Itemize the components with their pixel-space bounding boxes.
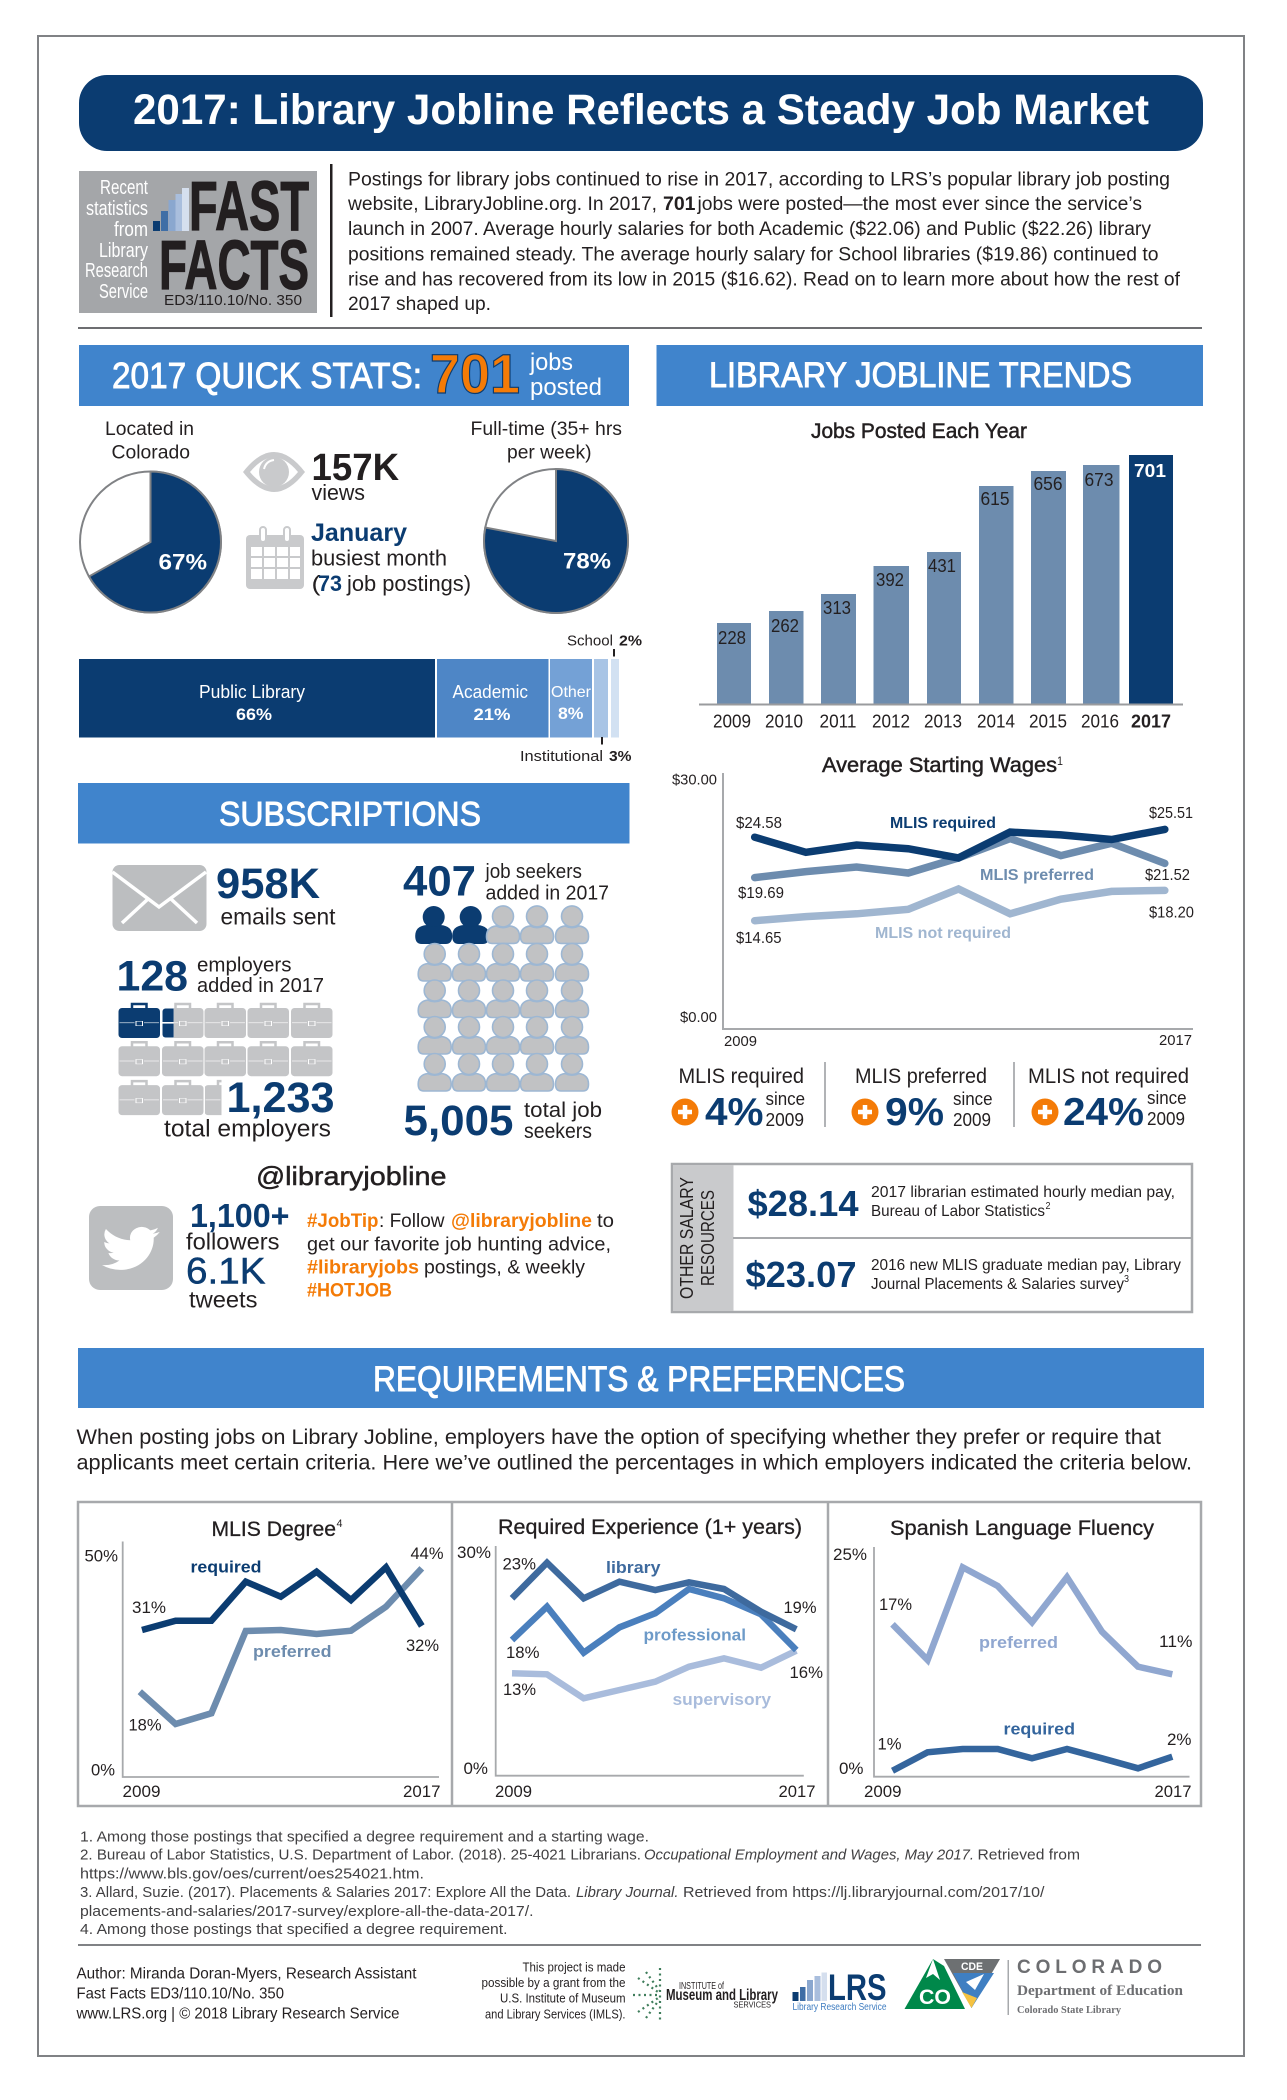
panel frame: requirement charts — [78, 1502, 1201, 1806]
icon: calendar with busiest month: job postings) — [346, 571, 471, 596]
line chart: MLIS degree: required — [190, 1558, 262, 1576]
stat: employers added: 128 — [116, 952, 188, 1000]
stat: job seekers added: added in 2017 — [486, 882, 609, 904]
logo: CDE emblem: CO — [919, 1986, 951, 2009]
footnotes — [80, 1828, 1080, 1938]
title banner — [79, 75, 1203, 151]
heading: quick stats: 2017 QUICK STATS: — [112, 355, 422, 396]
line chart: MLIS degree: 50% — [84, 1548, 118, 1566]
stat: employers added: employers — [197, 954, 292, 976]
line chart: MLIS degree: 32% — [406, 1637, 439, 1655]
bar chart: jobs posted each year: 2012 — [872, 712, 910, 732]
panel: other salary resources: 2 — [1046, 1201, 1051, 1212]
heading: subscriptions — [78, 783, 630, 844]
line chart: MLIS degree: 4 — [336, 1518, 342, 1530]
bar chart: jobs posted each year: 615 — [980, 489, 1010, 509]
footnotes: Library Journal. — [576, 1884, 678, 1901]
fast facts logo panel: statistics — [86, 198, 148, 220]
fast facts logo panel: Library — [99, 240, 148, 262]
bar chart: jobs posted each year: 2010 — [765, 712, 803, 732]
wage growth: MLIS preferred: MLIS preferred — [855, 1065, 987, 1088]
icon: eye with views stat — [243, 447, 400, 505]
panel: other salary resources: Bureau of Labor Statistics — [871, 1203, 1045, 1220]
vertical divider — [330, 164, 332, 317]
line chart: Spanish language fluency: 2017 — [1154, 1783, 1192, 1801]
bar chart: jobs posted each year: 2014 — [977, 712, 1015, 732]
logo: IMLS — [633, 1968, 778, 2022]
intro paragraph: jobs were posted—the most ever since the service’s — [696, 194, 1142, 215]
wage growth: MLIS required — [672, 1065, 805, 1134]
bar chart: jobs posted each year: 2017 — [1131, 712, 1171, 732]
intro paragraph: 2017 shaped up. — [348, 294, 491, 315]
pie chart: located in Colorado — [80, 419, 221, 612]
line chart: average starting wages: 2017 — [1159, 1032, 1192, 1049]
line chart: Spanish language fluency: 25% — [833, 1546, 867, 1564]
line chart: average starting wages — [672, 753, 1194, 1050]
intro paragraph — [347, 170, 1181, 315]
job tip paragraph: #HOTJOB — [307, 1280, 392, 1302]
footnotes: placements-and-salaries/2017-survey/explore-all-the-data-2017/. — [80, 1903, 534, 1920]
logo: Colorado Department of Education — [1008, 1957, 1183, 2016]
line chart: required experience: 23% — [502, 1556, 536, 1574]
job tip paragraph — [307, 1210, 614, 1302]
footnotes: 3. Allard, Suzie. (2017). Placements & Salaries 2017: Explore All the Data. — [80, 1884, 571, 1901]
logo: CDE emblem: CDE — [961, 1961, 983, 1973]
wage growth: MLIS preferred: 9% — [885, 1091, 944, 1134]
bar chart: jobs posted each year: 2015 — [1029, 712, 1067, 732]
icon: envelope with emails sent — [112, 860, 336, 931]
heading: quick stats: posted — [530, 374, 602, 401]
wage growth: MLIS not required: 24% — [1063, 1091, 1144, 1134]
line chart: average starting wages: $30.00 — [672, 772, 717, 788]
icon: calendar with busiest month: ( — [312, 571, 321, 596]
line chart: Spanish language fluency: preferred — [979, 1634, 1058, 1652]
logo: LRS: Library Research Service — [792, 2002, 887, 2013]
stacked bar: library type: 8% — [558, 704, 584, 723]
line chart: required experience: 13% — [503, 1681, 536, 1699]
intro paragraph: positions remained steady. The average hourly salary for School libraries ($19.86) continued to — [348, 244, 1158, 266]
job tip paragraph: #JobTip — [307, 1210, 379, 1232]
panel: other salary resources: OTHER SALARY — [677, 1177, 697, 1299]
line chart: required experience: library — [606, 1559, 661, 1577]
panel: other salary resources: $28.14 — [748, 1183, 858, 1224]
icon: calendar with busiest month: 73 — [318, 571, 342, 596]
heading: subscriptions: SUBSCRIPTIONS — [219, 796, 481, 834]
logo: CDE emblem — [904, 1959, 1000, 2009]
line chart: Spanish language fluency: 2% — [1167, 1731, 1192, 1749]
wage growth: MLIS required: 4% — [705, 1091, 764, 1134]
bar chart: jobs posted each year: 2011 — [820, 712, 856, 732]
stat: job seekers added — [403, 858, 609, 906]
heading: requirements and preferences — [78, 1348, 1204, 1408]
bar chart: jobs posted each year: 673 — [1084, 470, 1114, 490]
heading: library jobline trends: LIBRARY JOBLINE TRENDS — [709, 356, 1132, 395]
fast facts logo panel — [79, 167, 317, 313]
footnotes: 2. Bureau of Labor Statistics, U.S. Department of Labor. (2018). 25-4021 Librarians. — [80, 1846, 641, 1864]
wage growth: MLIS required: 2009 — [766, 1110, 804, 1130]
wage growth: MLIS preferred — [852, 1065, 992, 1134]
heading: quick stats — [79, 342, 629, 406]
grant statement: and Library Services (IMLS). — [485, 2008, 626, 2022]
bar chart: jobs posted each year: 228 — [718, 628, 746, 648]
footnotes: 4. Among those postings that specified a degree requirement. — [80, 1921, 508, 1938]
line chart: required experience: 19% — [784, 1599, 817, 1617]
line chart: Spanish language fluency: 0% — [839, 1760, 864, 1778]
panel: other salary resources: 3 — [1124, 1274, 1129, 1285]
twitter stats — [186, 1197, 290, 1312]
intro paragraph: Postings for library jobs continued to rise in 2017, according to LRS’s popular library job posting — [348, 170, 1170, 190]
line chart: Spanish language fluency: required — [1004, 1720, 1075, 1738]
heading: requirements and preferences: REQUIREMENTS & PREFERENCES — [373, 1360, 905, 1399]
line chart: Spanish language fluency: 1% — [878, 1736, 902, 1754]
line chart: average starting wages: MLIS preferred — [980, 867, 1094, 884]
stat: total employers: 1,233 — [226, 1074, 334, 1122]
pie chart: full-time — [470, 419, 628, 613]
footnotes: 1. Among those postings that specified a degree requirement and a starting wage. — [80, 1828, 649, 1846]
icon: calendar with busiest month: January — [311, 519, 407, 547]
stacked bar: library type: 66% — [236, 705, 272, 724]
horizontal rule — [78, 327, 1202, 329]
line chart: average starting wages: MLIS required — [890, 815, 996, 832]
line chart: average starting wages: Average Starting Wages — [822, 753, 1057, 777]
line chart: MLIS degree: preferred — [253, 1643, 332, 1661]
grant statement: U.S. Institute of Museum — [500, 1992, 626, 2006]
twitter stats: tweets — [189, 1286, 258, 1312]
bar chart: jobs posted each year: 2013 — [924, 712, 962, 732]
fast facts logo panel: ED3/110.10/No. 350 — [164, 293, 302, 309]
logo: Colorado Department of Education: Department of Education — [1017, 1983, 1183, 1999]
stat: employers added: added in 2017 — [197, 974, 324, 997]
fast facts logo panel: FACTS — [159, 226, 309, 304]
line chart: average starting wages: $24.58 — [736, 815, 782, 832]
footnotes: Retrieved from https://lj.libraryjournal.com/2017/10/ — [683, 1884, 1045, 1901]
job tip paragraph: get our favorite job hunting advice, — [307, 1234, 611, 1256]
panel: other salary resources: RESOURCES — [698, 1190, 718, 1286]
stat: employers added — [116, 952, 324, 1000]
line chart: Spanish language fluency: 2009 — [864, 1783, 902, 1801]
logo: Colorado Department of Education: COLORADO — [1017, 1957, 1162, 1978]
title banner: 2017: Library Jobline Reflects a Steady Job Market — [133, 86, 1149, 134]
stacked bar: library type: Public Library — [199, 682, 305, 702]
footnotes: Occupational Employment and Wages, May 2017. — [644, 1846, 974, 1864]
line chart: average starting wages: $0.00 — [680, 1009, 717, 1026]
panel: other salary resources: $23.07 — [746, 1254, 856, 1295]
twitter stats: 1,100+ — [190, 1197, 290, 1234]
line chart: average starting wages: MLIS not required — [875, 925, 1011, 942]
fast facts logo panel: FAST — [189, 167, 309, 245]
stat: total job seekers: total job — [524, 1098, 602, 1122]
bar chart: jobs posted each year: 313 — [823, 598, 851, 618]
job tip paragraph: : Follow — [379, 1210, 445, 1232]
requirements intro text: When posting jobs on Library Jobline, employers have the option of specifying whether they prefer or require that — [76, 1426, 1161, 1449]
author credits: www.LRS.org | © 2018 Library Research Service — [76, 2006, 400, 2022]
logo: Colorado Department of Education: Colorado State Library — [1017, 2005, 1122, 2016]
line chart: average starting wages: $21.52 — [1145, 867, 1190, 884]
icon: envelope with emails sent: emails sent — [220, 904, 336, 930]
panel: other salary resources — [672, 1164, 1192, 1312]
bar chart: jobs posted each year: 392 — [876, 570, 904, 590]
wage growth: MLIS not required: 2009 — [1147, 1109, 1185, 1129]
stat: total job seekers — [404, 1097, 602, 1145]
fast facts logo panel: from — [114, 219, 148, 241]
line chart: average starting wages: $19.69 — [738, 885, 784, 902]
line chart: required experience: professional — [644, 1626, 746, 1644]
line chart: required experience: 18% — [506, 1644, 540, 1662]
stacked bar: library type: School — [567, 632, 613, 650]
line chart: Spanish language fluency: Spanish Language Fluency — [890, 1517, 1155, 1540]
author credits — [76, 1966, 417, 2022]
icon: calendar with busiest month: busiest month — [311, 546, 447, 570]
job tip paragraph: to — [597, 1210, 614, 1232]
fast facts logo panel: Research — [85, 260, 148, 282]
intro paragraph: rise and has recovered from its low in 2015 ($16.62). Read on to learn more about how the rest of — [348, 270, 1181, 290]
divider — [824, 1062, 826, 1127]
panel: other salary resources: 2017 librarian estimated hourly median pay, — [871, 1184, 1175, 1201]
wage growth: MLIS not required: since — [1147, 1088, 1186, 1108]
job tip paragraph: @libraryjobline — [451, 1210, 592, 1232]
wage growth: MLIS preferred: since — [953, 1089, 992, 1109]
line chart: required experience: 0% — [464, 1760, 488, 1778]
stat: job seekers added: 407 — [403, 858, 476, 906]
stacked bar: library type: 2% — [619, 632, 642, 650]
bar chart: jobs posted each year: 656 — [1034, 474, 1062, 494]
twitter handle: @libraryjobline — [256, 1161, 446, 1191]
pie chart: located in Colorado: 67% — [158, 550, 207, 574]
footnotes: https://www.bls.gov/oes/current/oes254021.htm. — [80, 1866, 424, 1882]
line chart: required experience: 2017 — [778, 1783, 816, 1801]
pie chart: full-time: per week) — [507, 442, 592, 464]
twitter stats: 6.1K — [186, 1250, 266, 1292]
stat: total employers — [164, 1074, 334, 1142]
wage growth: MLIS required: since — [766, 1089, 805, 1109]
pie chart: located in Colorado: Colorado — [112, 442, 190, 464]
intro paragraph: launch in 2007. Average hourly salaries for both Academic ($22.06) and Public ($22.26) library — [348, 219, 1151, 240]
intro paragraph: website, LibraryJobline.org. In 2017, — [347, 194, 657, 215]
heading: quick stats: jobs — [529, 349, 573, 376]
footer rule — [78, 1944, 1201, 1946]
logo: IMLS: INSTITUTE of — [679, 1981, 724, 1992]
line chart: Spanish language fluency — [833, 1517, 1193, 1801]
icon: calendar with busiest month — [246, 519, 471, 596]
author credits: Author: Miranda Doran-Myers, Research Assistant — [76, 1966, 417, 1982]
line chart: required experience: 2009 — [495, 1783, 532, 1801]
line chart: average starting wages: $14.65 — [736, 930, 782, 947]
heading: quick stats: 701 — [430, 342, 520, 405]
pie chart: full-time: 78% — [563, 548, 611, 574]
grant statement: possible by a grant from the — [482, 1976, 626, 1990]
people pictogram grid — [415, 906, 588, 1091]
job tip paragraph: #libraryjobs — [307, 1256, 419, 1278]
grant statement — [482, 1960, 626, 2022]
logo: LRS: LRS — [828, 1967, 886, 2008]
line chart: MLIS degree — [84, 1518, 444, 1801]
pie chart: located in Colorado: Located in — [105, 419, 194, 440]
panel: other salary resources: Journal Placements & Salaries survey — [871, 1276, 1124, 1293]
line chart: Spanish language fluency: 17% — [879, 1596, 912, 1614]
line chart: MLIS degree: 0% — [91, 1762, 115, 1780]
icon: eye with views stat: views — [312, 480, 365, 505]
bar chart: jobs posted each year: 262 — [771, 616, 799, 636]
author credits: Fast Facts ED3/110.10/No. 350 — [76, 1986, 284, 2002]
line chart: MLIS degree: 44% — [410, 1545, 444, 1563]
bar chart: jobs posted each year — [699, 419, 1183, 732]
line chart: MLIS degree: 18% — [128, 1716, 162, 1734]
stacked bar: library type: 3% — [609, 748, 632, 765]
twitter stats: followers — [186, 1228, 280, 1254]
bar chart: jobs posted each year: 431 — [928, 556, 956, 576]
line chart: required experience: Required Experience (1+ years) — [498, 1516, 802, 1539]
logo: IMLS: Museum and Library — [666, 1987, 778, 2004]
wage growth: MLIS not required — [1028, 1065, 1189, 1134]
panel: other salary resources: 2016 new MLIS graduate median pay, Library — [871, 1257, 1181, 1274]
bar chart: jobs posted each year: 2016 — [1081, 712, 1119, 732]
line chart: MLIS degree: 31% — [132, 1599, 166, 1617]
line chart: Spanish language fluency: 11% — [1159, 1633, 1193, 1651]
line chart: average starting wages: 2009 — [724, 1033, 757, 1050]
wage growth: MLIS required: MLIS required — [678, 1065, 804, 1088]
icon: envelope with emails sent: 958K — [216, 860, 320, 908]
line chart: average starting wages: 1 — [1057, 754, 1063, 768]
intro paragraph: 701 — [663, 194, 696, 215]
requirements intro text — [76, 1426, 1192, 1474]
fast facts logo panel: Recent — [100, 177, 148, 199]
stat: total employers: total employers — [164, 1116, 331, 1142]
icon: eye with views stat: 157K — [312, 447, 400, 489]
stat: total job seekers: 5,005 — [404, 1097, 514, 1145]
line chart: required experience — [457, 1516, 823, 1801]
stacked bar: library type: 21% — [474, 705, 510, 724]
heading: library jobline trends — [656, 345, 1203, 406]
grant statement: This project is made — [522, 1960, 626, 1974]
job tip paragraph: postings, & weekly — [424, 1256, 585, 1278]
wage growth: MLIS not required: MLIS not required — [1028, 1065, 1189, 1088]
wage growth: MLIS preferred: 2009 — [953, 1110, 991, 1130]
line chart: average starting wages: $18.20 — [1149, 904, 1194, 922]
bar chart: jobs posted each year: Jobs Posted Each Year — [811, 419, 1027, 443]
logo: LRS — [792, 1967, 887, 2013]
logo: IMLS: SERVICES — [734, 2000, 771, 2010]
stat: job seekers added: job seekers — [485, 860, 582, 883]
line chart: average starting wages: $25.51 — [1149, 805, 1193, 822]
stacked bar: library type: Academic — [452, 682, 528, 702]
bar chart: jobs posted each year: 2009 — [713, 712, 751, 732]
footnotes: Retrieved from — [978, 1846, 1080, 1864]
line chart: required experience: supervisory — [672, 1691, 772, 1709]
divider — [1013, 1062, 1015, 1127]
line chart: MLIS degree: 2017 — [403, 1783, 440, 1801]
line chart: MLIS degree: 2009 — [122, 1783, 160, 1801]
line chart: MLIS degree: MLIS Degree — [212, 1518, 336, 1541]
icon: twitter bird — [89, 1206, 173, 1290]
stacked bar: library type: Other — [551, 684, 592, 701]
line chart: required experience: 16% — [790, 1664, 823, 1682]
stacked bar: library type — [79, 632, 642, 765]
requirements intro text: applicants meet certain criteria. Here we’ve outlined the percentages in which employers indicated the criteria below. — [76, 1452, 1192, 1474]
pie chart: full-time: Full-time (35+ hrs — [470, 419, 622, 440]
bar chart: jobs posted each year: 701 — [1134, 461, 1166, 481]
fast facts logo panel: Service — [99, 281, 148, 303]
stacked bar: library type: Institutional — [520, 748, 603, 765]
line chart: required experience: 30% — [457, 1544, 491, 1562]
briefcase pictogram grid — [119, 1004, 332, 1115]
stat: total job seekers: seekers — [524, 1119, 592, 1143]
